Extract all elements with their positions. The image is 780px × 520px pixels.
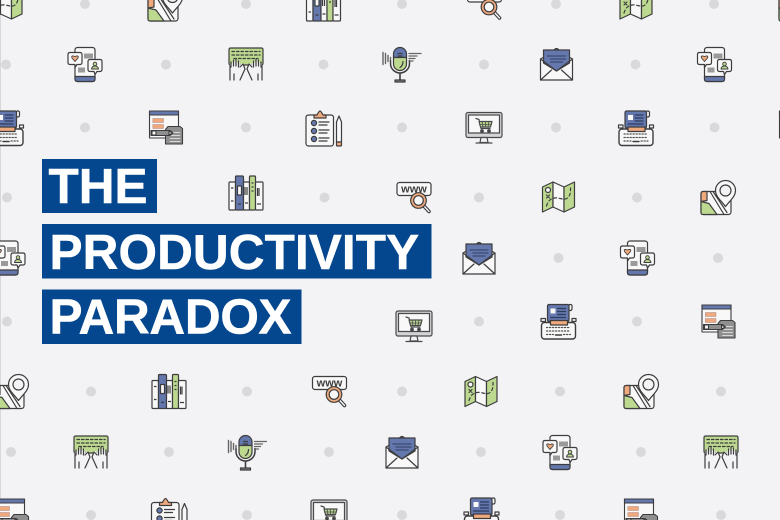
icon: clipboard checklist	[306, 111, 342, 146]
icon: microphone	[228, 436, 266, 470]
icon: phone chat, left edge	[0, 241, 25, 275]
icon: location pin map, top right edge	[779, 0, 780, 21]
icon: open envelope	[463, 242, 495, 274]
icon: open envelope	[540, 48, 572, 80]
title line: PRODUCTIVITY: PRODUCTIVITY	[50, 225, 419, 280]
title	[42, 159, 432, 344]
icon: web page and document	[702, 305, 735, 338]
icon: www search: www	[316, 378, 343, 390]
icon: folded map	[465, 376, 497, 406]
icon: www search	[312, 376, 346, 406]
icon: web page and document, bottom left	[0, 499, 28, 520]
icon: typewriter, left edge	[0, 111, 24, 146]
icon: books	[152, 374, 186, 408]
icon: microphone	[383, 48, 421, 82]
icon: web page and document, right edge	[780, 111, 781, 144]
icon: typewriter	[618, 111, 654, 146]
icon: keyboard hands	[74, 436, 108, 468]
icon: phone chat	[543, 436, 577, 470]
icon: folded map	[542, 182, 574, 212]
icon: phone chat	[620, 241, 654, 275]
icon: clipboard checklist, bottom	[152, 498, 187, 520]
icon: location pin map, left edge	[0, 374, 28, 408]
icon: location pin map, top row	[148, 0, 182, 21]
title line: THE: THE	[48, 159, 148, 214]
icon: location pin map	[624, 374, 658, 408]
icon: typewriter, bottom	[464, 498, 499, 520]
icon: folded map, top row	[620, 0, 652, 19]
icon: books, top row	[306, 0, 340, 21]
icon: shopping cart monitor	[466, 112, 502, 143]
icon: phone chat	[68, 48, 102, 82]
icon: folded map, top left	[0, 0, 22, 19]
icon: shopping cart monitor, bottom	[311, 500, 347, 520]
icon: www search, top row	[468, 0, 502, 18]
icon: phone chat	[698, 48, 732, 82]
icon: keyboard hands	[704, 436, 738, 468]
icon: keyboard hands	[229, 48, 263, 80]
icon: www search	[397, 182, 431, 212]
icon: shopping cart monitor	[396, 311, 432, 342]
icon: web page and document	[150, 111, 182, 144]
icon: www search: www	[400, 184, 427, 196]
title line: PARADOX: PARADOX	[50, 290, 292, 344]
icon: books	[229, 176, 263, 210]
icon: typewriter	[541, 304, 576, 339]
icon: web page and document, bottom	[624, 499, 658, 520]
icon: location pin map	[701, 180, 736, 214]
icon: open envelope	[386, 436, 418, 468]
